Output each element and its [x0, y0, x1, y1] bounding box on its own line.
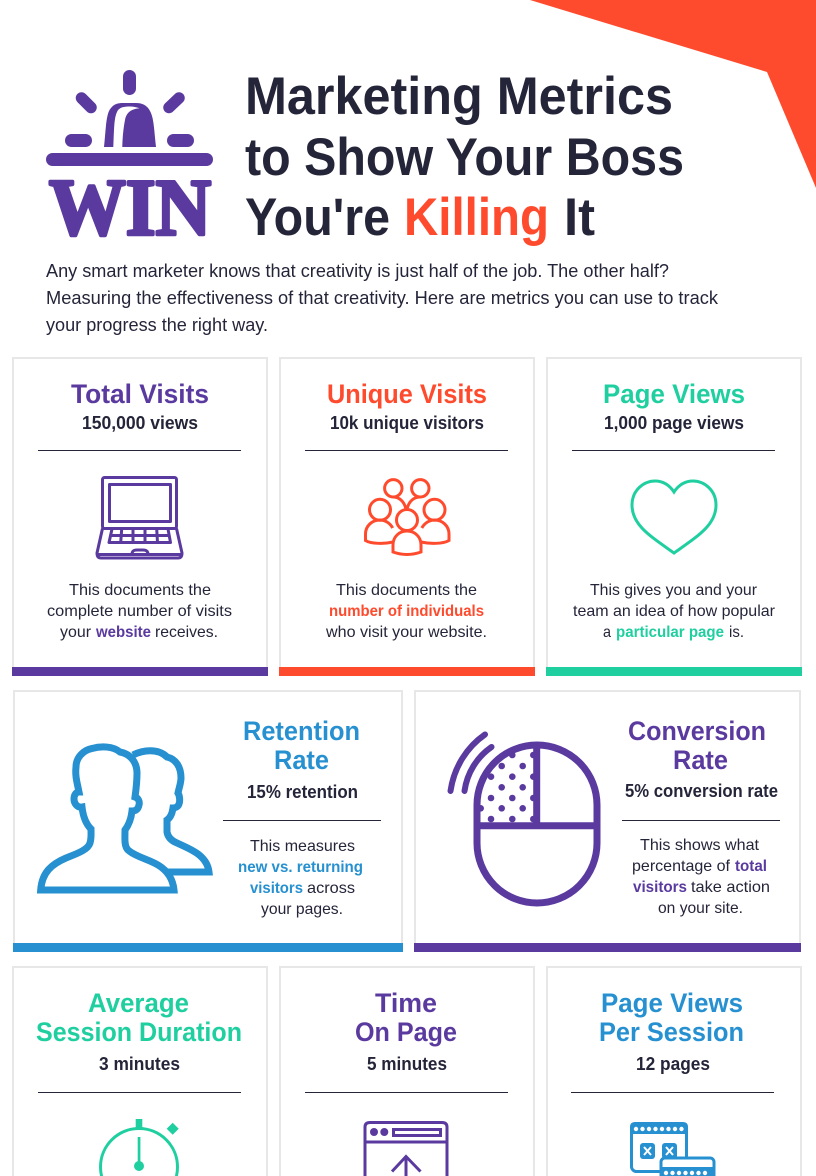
icon: group of people: [366, 480, 449, 554]
body text: This documents the: [69, 582, 211, 599]
body text: your pages.: [261, 901, 343, 918]
body text: team an idea of how popular: [573, 603, 776, 620]
intro text: Measuring the effectiveness of that creativity. Here are metrics you can use to track: [46, 288, 719, 308]
heading: time on page: [355, 988, 457, 1047]
body text: number of individuals: [329, 603, 484, 620]
heading: page views per session: [599, 988, 744, 1047]
body text: [238, 838, 363, 918]
stat: 1,000 page views: 1,000 page views: [604, 413, 744, 433]
icon: heart: [632, 481, 716, 553]
intro text: [46, 261, 719, 335]
heading: conversion rate: Rate: [673, 745, 728, 775]
stat: 150,000 views: 150,000 views: [82, 413, 198, 433]
stat: 3 minutes: 3 minutes: [99, 1054, 180, 1074]
body text: [47, 582, 232, 641]
body text: visitors: [250, 880, 303, 897]
body text: This documents the: [336, 582, 477, 599]
heading: retention rate: [243, 716, 360, 775]
stat: 5% conversion rate: 5% conversion rate: [625, 781, 778, 801]
icon: computer mouse: [450, 734, 597, 903]
body text: a: [603, 624, 611, 641]
body text: total: [735, 858, 767, 875]
title: It: [564, 188, 595, 247]
body text: This gives you and your: [590, 582, 758, 599]
body text: new vs. returning: [238, 859, 363, 876]
body text: [573, 582, 776, 641]
heading: retention rate: Retention: [243, 716, 360, 746]
title: You're: [245, 188, 390, 247]
title: Marketing Metrics: [245, 67, 673, 126]
heading: page views per session: Per Session: [599, 1017, 744, 1047]
body text: percentage of: [632, 858, 731, 875]
panel: retention rate: [13, 691, 403, 952]
stat: 15% retention: 15% retention: [247, 782, 358, 802]
body text: your: [60, 624, 92, 641]
panel: total visits: [12, 358, 268, 676]
title: [245, 67, 684, 247]
heading: page views per session: Page Views: [601, 988, 743, 1018]
icon: win bell logo: WIN: [49, 164, 211, 252]
icon: win bell logo: [46, 70, 213, 252]
stat: 10k unique visitors: 10k unique visitors: [330, 413, 484, 433]
body text: take action: [691, 879, 770, 896]
panel: page views per session: [547, 967, 801, 1176]
body text: receives.: [155, 624, 218, 641]
heading: average session duration: [36, 988, 242, 1047]
heading: page views: Page Views: [603, 379, 745, 409]
stat: 12 pages: 12 pages: [636, 1054, 710, 1074]
body text: This measures: [250, 838, 355, 855]
body text: particular page: [616, 624, 724, 641]
icon: two people silhouettes: [41, 747, 209, 890]
stat: 5 minutes: 5 minutes: [367, 1054, 447, 1074]
heading: conversion rate: Conversion: [628, 716, 766, 746]
body text: who visit your website.: [325, 624, 487, 641]
body text: [632, 837, 770, 917]
title: Killing: [404, 188, 549, 247]
body text: This shows what: [640, 837, 760, 854]
panel: average session duration: [13, 967, 267, 1176]
icon: browser windows: [630, 1122, 715, 1176]
body text: [325, 582, 487, 641]
intro text: your progress the right way.: [46, 315, 268, 335]
panel: unique visits: [279, 358, 535, 676]
icon: stopwatch: [100, 1119, 179, 1176]
title: to Show Your Boss: [245, 128, 684, 187]
panel: time on page: [280, 967, 534, 1176]
body text: visitors: [633, 879, 687, 896]
panel: page views: [546, 358, 802, 676]
heading: conversion rate: [628, 716, 766, 775]
heading: retention rate: Rate: [274, 745, 329, 775]
corner decoration: [530, 0, 816, 188]
heading: total visits: Total Visits: [71, 379, 209, 409]
panel: conversion rate: [414, 691, 801, 952]
heading: unique visits: Unique Visits: [327, 379, 487, 409]
body text: website: [95, 624, 151, 641]
heading: time on page: On Page: [355, 1017, 457, 1047]
icon: laptop: [97, 478, 182, 558]
body text: complete number of visits: [47, 603, 232, 620]
intro text: Any smart marketer knows that creativity is just half of the job. The other half?: [46, 261, 669, 281]
icon: browser window with arrow: [365, 1122, 447, 1176]
body text: on your site.: [658, 900, 743, 917]
body text: is.: [729, 624, 744, 641]
heading: average session duration: Average: [88, 988, 189, 1018]
heading: average session duration: Session Duration: [36, 1017, 242, 1047]
body text: across: [307, 880, 355, 897]
heading: time on page: Time: [375, 988, 437, 1018]
